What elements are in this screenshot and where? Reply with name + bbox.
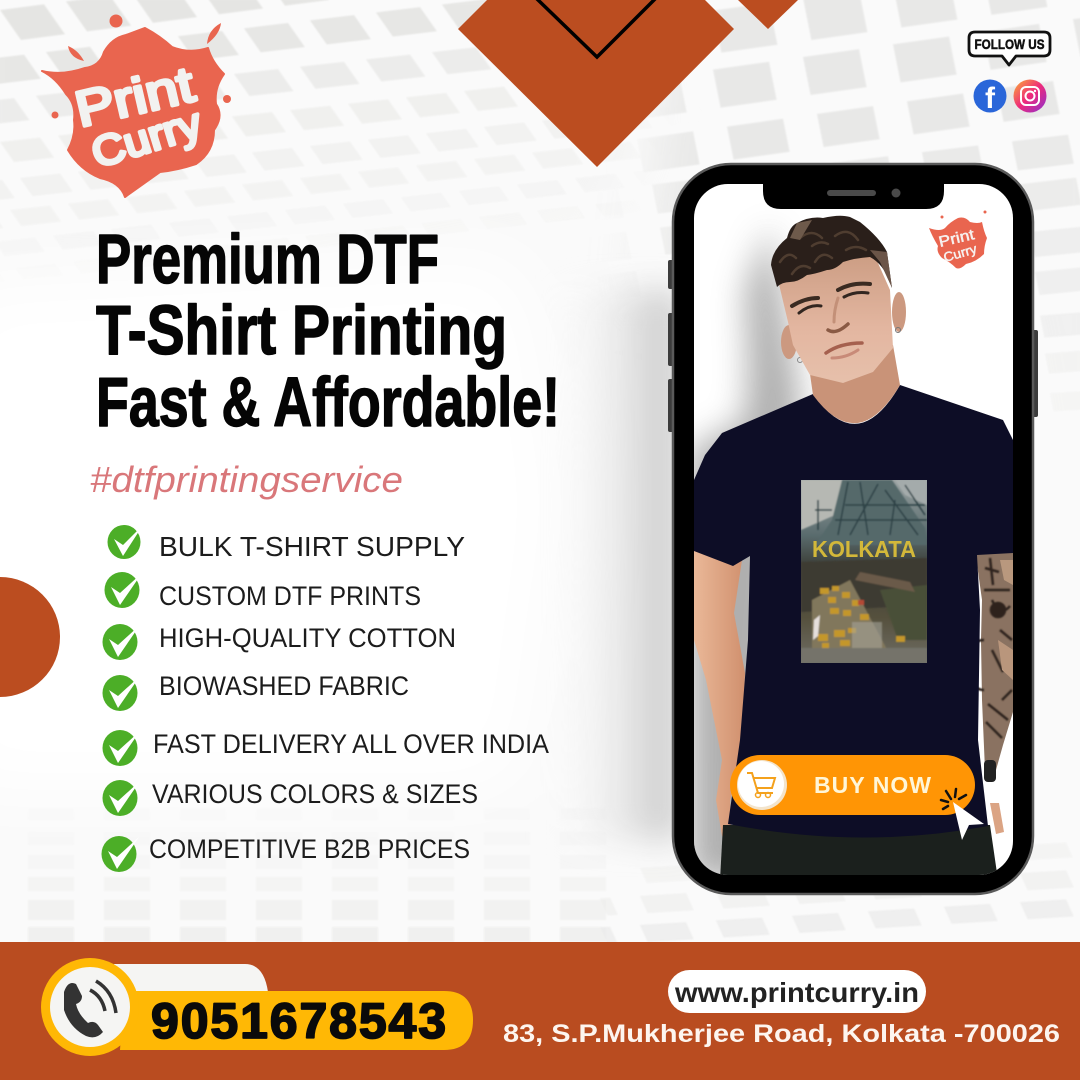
icon: cart	[737, 760, 787, 810]
footer band	[0, 942, 1080, 1080]
item: high-quality cotton: HIGH-QUALITY COTTON	[159, 623, 456, 653]
phone camera	[892, 188, 900, 198]
address: 83, S.P.Mukherjee Road, Kolkata -700026	[503, 1020, 1060, 1048]
phone number badge	[41, 958, 473, 1056]
website pill	[668, 970, 926, 1013]
model t-shirt	[694, 385, 1013, 838]
follow us speech bubble: FOLLOW US	[974, 37, 1044, 52]
item: bulk t-shirt supply: BULK T-SHIRT SUPPLY	[159, 531, 465, 562]
item: custom dtf prints	[104, 572, 421, 611]
phone body	[673, 164, 1033, 894]
item: biowashed fabric	[102, 671, 409, 711]
decorative half circle	[0, 577, 60, 697]
buy now button	[730, 755, 975, 815]
model hair	[771, 216, 892, 288]
buy now button: BUY NOW	[814, 772, 931, 798]
phone side buttons	[668, 260, 1038, 432]
icon: facebook: f	[985, 82, 996, 115]
mini logo on screen	[929, 210, 987, 268]
headline: T-Shirt Printing	[96, 291, 507, 369]
item: fast delivery: FAST DELIVERY ALL OVER INDIA	[153, 729, 549, 759]
model drop shadow	[690, 225, 800, 880]
item: fast delivery	[102, 729, 549, 766]
phone speaker	[827, 190, 876, 196]
phone notch	[763, 184, 944, 209]
item: b2b prices: COMPETITIVE B2B PRICES	[149, 834, 470, 864]
model right arm with tattoos	[977, 553, 1013, 834]
logo: Print Curry splash: Curry	[86, 99, 207, 177]
item: high-quality cotton	[102, 623, 456, 660]
model neck	[808, 345, 900, 423]
icon: instagram	[1014, 80, 1046, 112]
mini logo on screen: Print	[937, 226, 977, 251]
feature list	[102, 525, 549, 872]
item: custom dtf prints: CUSTOM DTF PRINTS	[159, 581, 421, 611]
item: b2b prices	[102, 834, 470, 872]
decorative large diamond with V outline	[458, 0, 734, 167]
model left arm	[694, 540, 745, 836]
item: biowashed fabric: BIOWASHED FABRIC	[159, 671, 409, 701]
phone number: 9051678543	[151, 993, 446, 1049]
phone mockup	[668, 164, 1038, 894]
logo: Print Curry splash: Print	[70, 56, 200, 138]
item: colors and sizes	[102, 779, 478, 816]
white tab	[114, 964, 268, 992]
website pill: www.printcurry.in	[674, 977, 919, 1008]
t-shirt print: Kolkata artwork	[801, 480, 927, 663]
model trousers	[720, 825, 998, 880]
headline: Premium DTF	[96, 220, 439, 298]
yellow number pill	[120, 991, 473, 1050]
decorative small diamond	[738, 0, 798, 29]
model face	[778, 245, 893, 383]
model facial features	[792, 284, 870, 358]
icon: telephone	[41, 958, 139, 1056]
model ears	[781, 292, 906, 362]
print title: KOLKATA	[812, 536, 916, 562]
item: colors and sizes: VARIOUS COLORS & SIZES	[152, 779, 478, 809]
logo: Print Curry splash	[42, 14, 231, 197]
headline	[96, 220, 560, 441]
headline: Fast & Affordable!	[96, 363, 560, 441]
phone screen with model	[690, 184, 1013, 880]
follow us speech bubble	[969, 32, 1050, 65]
icon: facebook	[974, 80, 1006, 115]
icon: cursor with click sparks	[941, 789, 984, 840]
hashtag: #dtfprintingservice	[90, 459, 403, 500]
mini logo on screen: Curry	[942, 241, 979, 265]
